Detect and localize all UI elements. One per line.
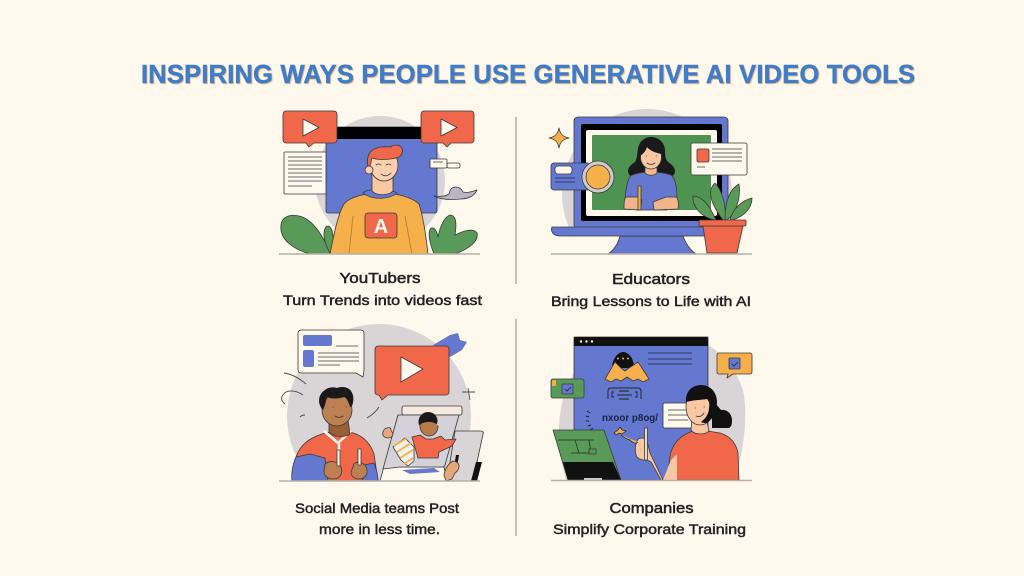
title: INSPIRING WAYS PEOPLE USE GENERATIVE AI VIDEO TOOLS [142, 62, 916, 90]
document card [284, 152, 326, 194]
title: INSPIRING WAYS PEOPLE USE GENERATIVE AI VIDEO TOOLS [141, 61, 915, 89]
magnifier tag [551, 161, 614, 193]
play bubble [375, 346, 449, 400]
green check card [551, 379, 584, 398]
speech card [663, 403, 699, 428]
caption: Companies [553, 500, 746, 537]
panel: Companies [551, 337, 752, 537]
mascot icon [605, 352, 649, 382]
tablets with creator [380, 406, 483, 481]
green laptop [553, 430, 621, 480]
post card bubble [298, 330, 364, 377]
yellow check bubble [717, 353, 752, 378]
caption: Educators: Bring Lessons to Life with AI [551, 293, 751, 309]
icon: sparkle [549, 128, 569, 148]
panel: YouTubers [279, 111, 482, 308]
caption: Social Media teams [295, 500, 459, 537]
man [292, 387, 378, 481]
teacher [624, 137, 678, 210]
plant [693, 183, 752, 253]
plants [281, 215, 477, 254]
caption: YouTubers: YouTubers [340, 270, 420, 287]
caption: Social Media teams: Social Media teams Post [295, 500, 459, 516]
caption: YouTubers: Turn Trends into videos fast [283, 292, 482, 308]
caption: Companies: Simplify Corporate Training [553, 521, 746, 537]
panel: Social Media teams [279, 324, 483, 537]
illustration: educator at monitor [548, 109, 752, 255]
illustration: YouTuber [279, 111, 480, 254]
icon: right play bubble [421, 111, 474, 147]
person: A [374, 216, 388, 238]
caption: Educators [551, 271, 751, 309]
icon: left play bubble [283, 111, 337, 147]
illustration: corporate trainer [551, 337, 752, 480]
browser window [574, 337, 708, 480]
monitor stand [551, 227, 723, 254]
caption: Educators: Educators [612, 271, 690, 288]
person [330, 145, 428, 254]
browser window: nxoor p8og/ [602, 413, 658, 424]
info card [691, 143, 747, 175]
caption: Social Media teams: more in less time. [319, 521, 440, 537]
mouse doodle [434, 187, 477, 200]
panel: Educators [549, 109, 752, 309]
small label card [430, 159, 460, 168]
ribbon [433, 333, 467, 357]
caption: YouTubers [283, 270, 482, 308]
illustration: social media creator [279, 324, 484, 482]
woman [635, 385, 739, 480]
caption: Companies: Companies [610, 500, 694, 517]
